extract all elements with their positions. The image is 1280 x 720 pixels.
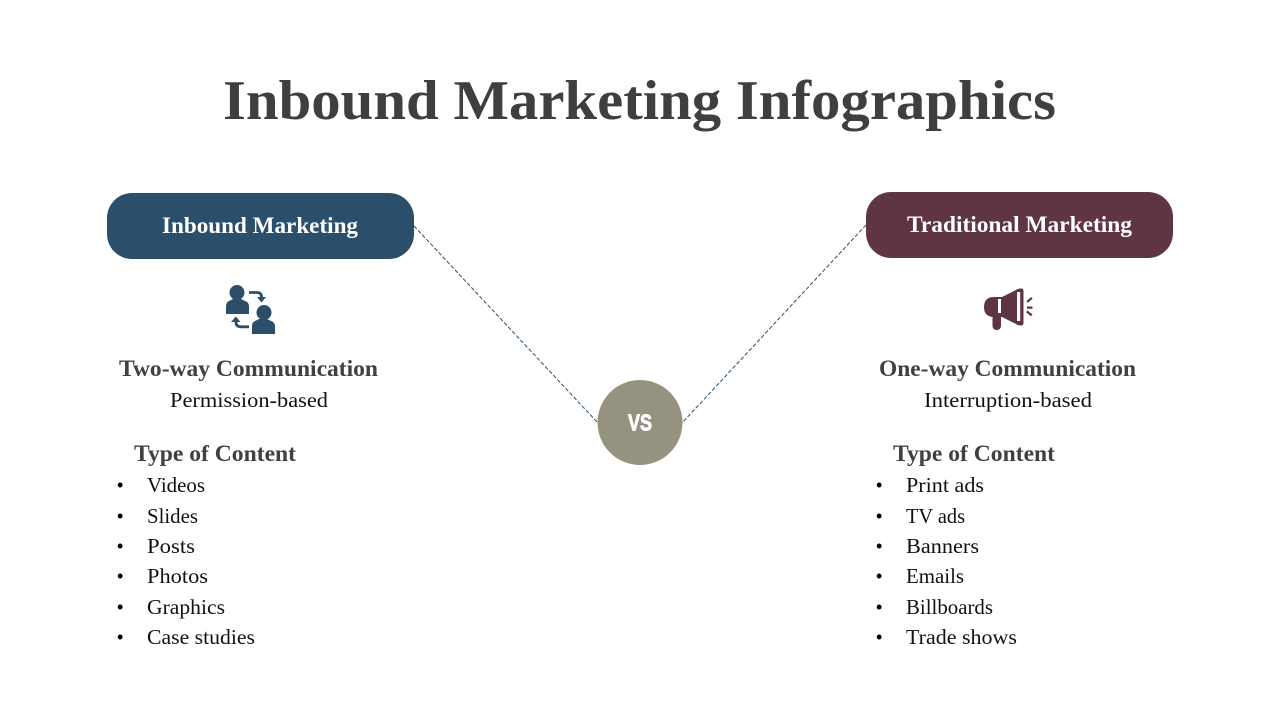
- list: traditional content types: Banners: [906, 534, 979, 558]
- list: traditional content types: •: [876, 566, 882, 586]
- traditional header pill: Traditional Marketing: [907, 212, 1133, 237]
- list: traditional content types: Trade shows: [906, 625, 1017, 649]
- text: permission-based: Permission-based: [170, 388, 328, 412]
- heading: two-way communication: Two-way Communication: [119, 356, 378, 381]
- title: Inbound Marketing Infographics: [223, 70, 1056, 132]
- list: inbound content types: •: [117, 566, 123, 586]
- connector: inbound to VS: [414, 226, 598, 423]
- list: inbound content types: Photos: [147, 564, 208, 588]
- list: traditional content types: •: [876, 536, 882, 556]
- traditional header pill: [866, 192, 1173, 258]
- list: inbound content types: •: [117, 597, 123, 617]
- list: traditional content types: Print ads: [906, 473, 984, 497]
- icon: megaphone: [984, 288, 1033, 330]
- heading: one-way communication: One-way Communication: [879, 356, 1136, 381]
- list: traditional content types: [876, 473, 1017, 649]
- list: traditional content types: Emails: [906, 564, 964, 588]
- icon: two people exchanging messages: [226, 285, 275, 334]
- heading: type of content: Type of Content: [893, 441, 1055, 466]
- list: traditional content types: •: [876, 627, 882, 647]
- list: traditional content types: •: [876, 506, 882, 526]
- connector: traditional to VS: [682, 225, 866, 423]
- list: inbound content types: Case studies: [147, 625, 255, 649]
- list: inbound content types: Posts: [147, 534, 195, 558]
- list: inbound content types: [117, 473, 255, 649]
- list: inbound content types: Videos: [147, 473, 205, 497]
- list: traditional content types: TV ads: [906, 504, 965, 528]
- VS badge: [598, 380, 682, 465]
- list: traditional content types: •: [876, 475, 882, 495]
- panel: inbound marketing: [107, 193, 414, 649]
- list: inbound content types: Slides: [147, 504, 198, 528]
- list: inbound content types: •: [117, 627, 123, 647]
- inbound header pill: Inbound Marketing: [162, 213, 358, 238]
- text: interruption-based: Interruption-based: [924, 388, 1092, 412]
- VS badge: VS: [628, 410, 652, 436]
- list: inbound content types: •: [117, 506, 123, 526]
- list: inbound content types: Graphics: [147, 595, 225, 619]
- list: inbound content types: •: [117, 475, 123, 495]
- panel: traditional marketing: [866, 192, 1173, 649]
- inbound header pill: [107, 193, 414, 259]
- list: traditional content types: Billboards: [906, 595, 993, 619]
- list: inbound content types: •: [117, 536, 123, 556]
- heading: type of content: Type of Content: [134, 441, 296, 466]
- list: traditional content types: •: [876, 597, 882, 617]
